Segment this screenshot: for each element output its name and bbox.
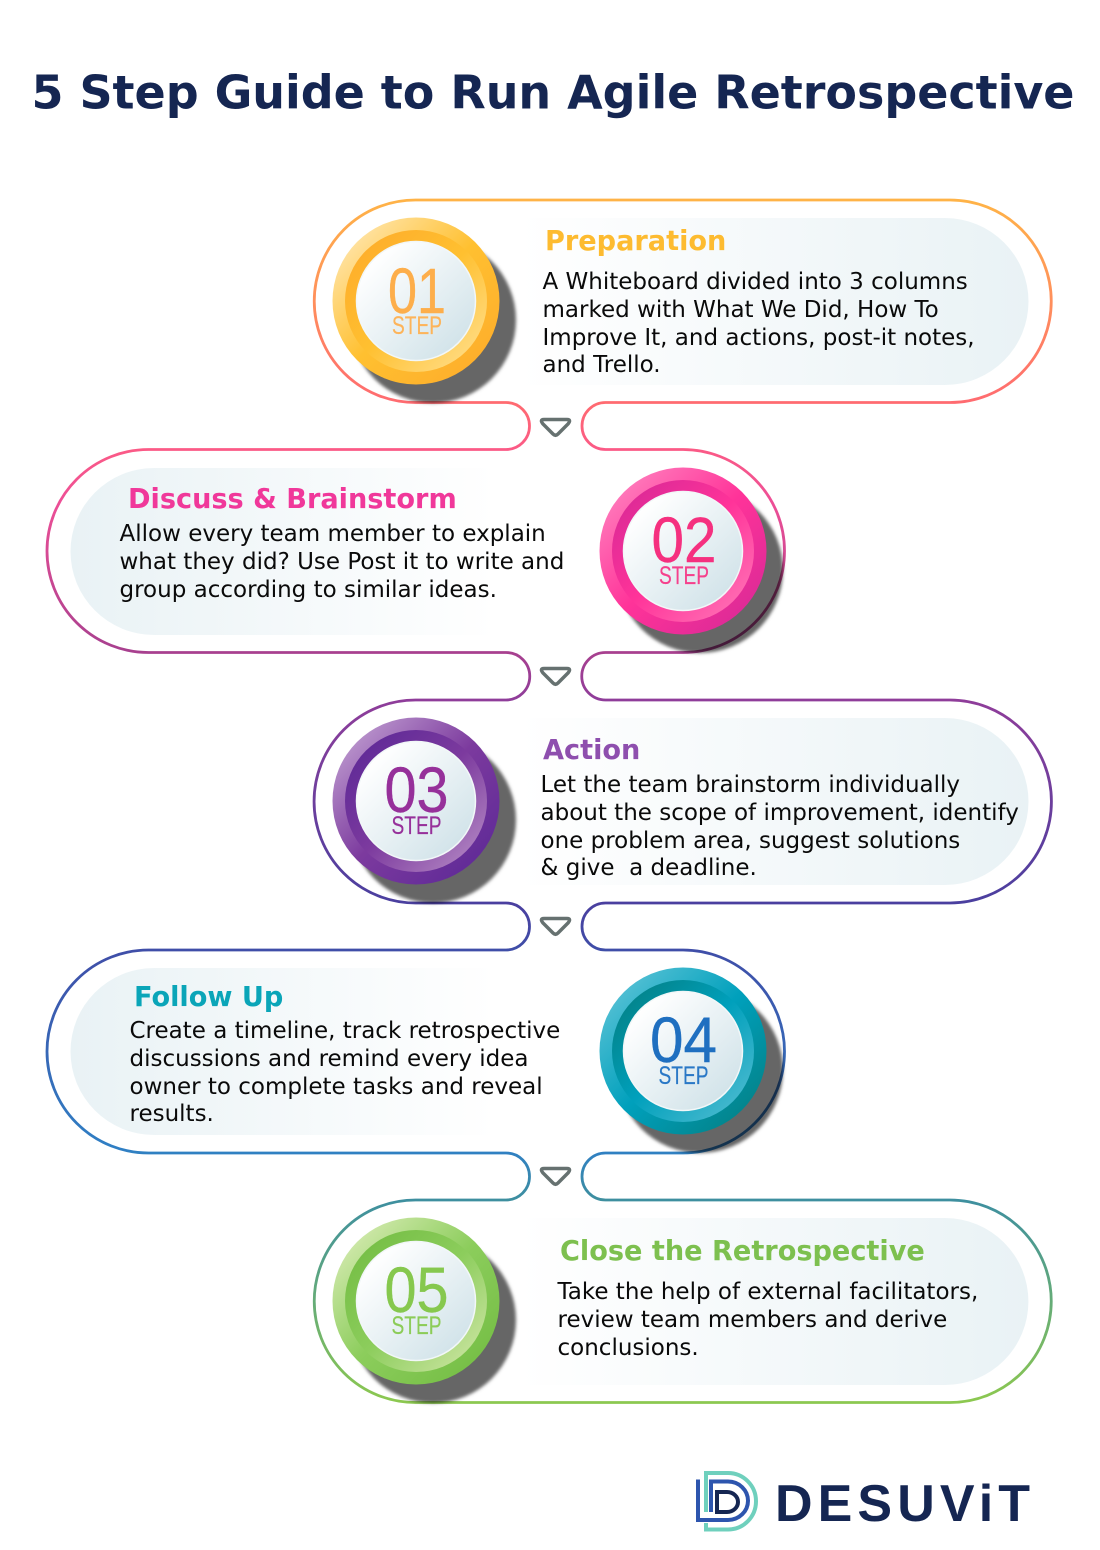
step 5 badge: 05	[384, 1254, 448, 1326]
panel: step 4 background	[71, 968, 570, 1135]
panel: step 1 background	[430, 218, 1028, 385]
step 2 text: group according to similar ideas.	[120, 577, 497, 603]
step 4 text: discussions and remind every idea	[130, 1046, 528, 1072]
title: 5 Step Guide to Run Agile Retrospective	[32, 66, 1074, 120]
step 1 text: Preparation	[545, 226, 726, 257]
arrow: step 4 to 5	[541, 1168, 570, 1184]
step 5 text: conclusions.	[558, 1335, 699, 1361]
step 4 text: Create a timeline, track retrospective	[130, 1018, 560, 1044]
arrow: step 3 to 4	[541, 918, 570, 934]
ribbon outline connecting steps	[47, 200, 1051, 1402]
step 3 badge: STEP	[392, 812, 442, 840]
step 3 text: about the scope of improvement, identify	[540, 800, 1019, 826]
step 1 text: Improve It, and actions, post-it notes,	[542, 325, 975, 351]
logo wordmark: DESUViT	[775, 1475, 1030, 1533]
step 5 text: review team members and derive	[558, 1307, 947, 1333]
step 1 text: A Whiteboard divided into 3 columns	[542, 269, 968, 295]
step 2 text: Discuss & Brainstorm	[128, 484, 457, 515]
step 1 text: and Trello.	[542, 352, 661, 378]
step 3 text: one problem area, suggest solutions	[540, 828, 960, 854]
step 4 badge	[600, 968, 783, 1153]
arrow: step 2 to 3	[541, 668, 570, 684]
icon: logo mark	[698, 1473, 756, 1530]
step 4 badge: 04	[650, 1004, 717, 1076]
step 2 text: what they did? Use Post it to write and	[120, 549, 564, 575]
step 4 text: results.	[130, 1101, 214, 1127]
step 2 text	[120, 484, 564, 603]
panel: step 2 background	[71, 468, 570, 635]
step 3 text: Let the team brainstorm individually	[540, 772, 960, 798]
arrow: step 1 to 2	[541, 420, 570, 435]
step 2 badge: STEP	[659, 562, 709, 590]
step 2 badge: 02	[652, 504, 716, 576]
panel: step 5 background	[430, 1218, 1028, 1385]
step 5 badge	[332, 1218, 516, 1403]
step 4 text: Follow Up	[134, 982, 283, 1013]
step 5 text	[556, 1236, 978, 1361]
step 4 badge: STEP	[658, 1062, 708, 1090]
step 3 text: Action	[543, 735, 640, 766]
step 3 text	[540, 735, 1019, 881]
step 1 text: marked with What We Did, How To	[542, 297, 939, 323]
step 3 text: & give a deadline.	[540, 855, 757, 881]
logo: Desuvit	[698, 1473, 1030, 1533]
step 2 text: Allow every team member to explain	[120, 521, 546, 547]
step 2 badge	[600, 468, 783, 653]
step 1 badge: STEP	[392, 312, 442, 340]
step 5 badge: STEP	[392, 1312, 442, 1340]
step 1 badge: 01	[388, 255, 446, 327]
step 1 text	[542, 226, 975, 378]
step 3 badge: 03	[384, 754, 448, 826]
step 1 badge	[332, 218, 516, 403]
step 5 text: Take the help of external facilitators,	[556, 1279, 978, 1305]
panel: step 3 background	[430, 718, 1028, 885]
step 5 text: Close the Retrospective	[560, 1236, 925, 1267]
step 4 text: owner to complete tasks and reveal	[130, 1074, 543, 1100]
step 4 text	[130, 982, 560, 1127]
step 3 badge	[332, 718, 516, 903]
